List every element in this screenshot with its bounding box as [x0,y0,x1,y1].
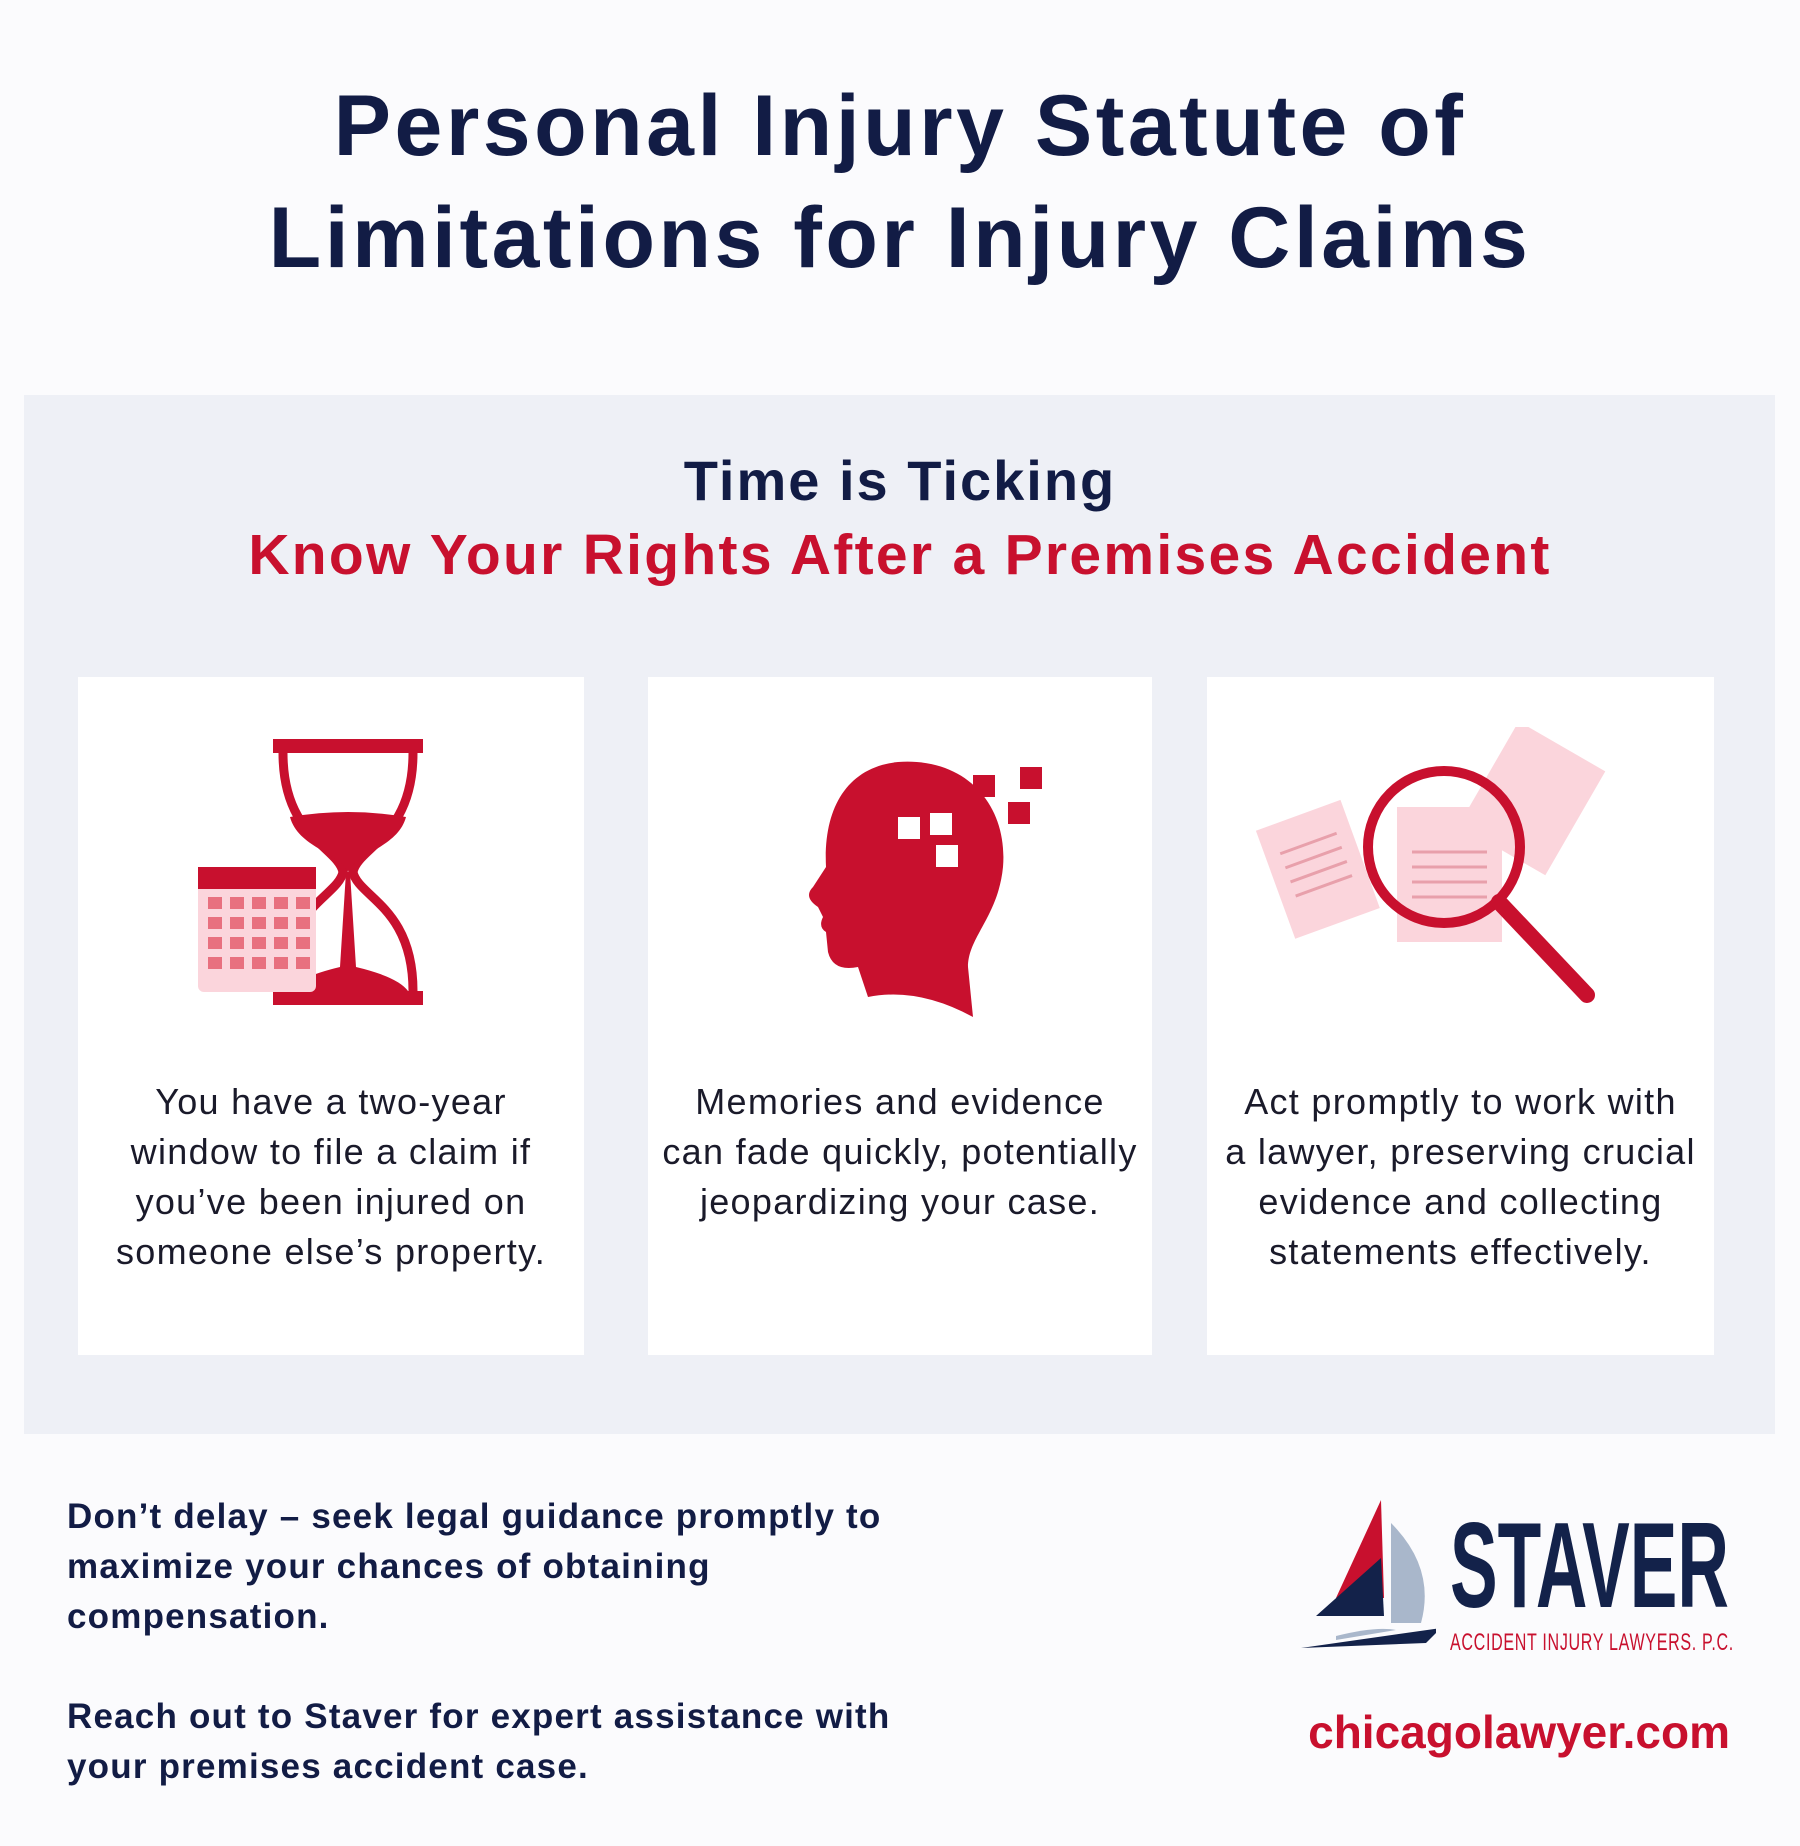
text: card 3: statements effectively. [1269,1231,1652,1272]
heading: time is ticking: Time is Ticking [684,449,1116,512]
text: card 3: Act promptly to work with [1244,1081,1677,1122]
text: card 3: evidence and collecting [1258,1181,1663,1222]
text: card 3: a lawyer, preserving crucial [1225,1131,1696,1172]
subheading: Know Your Rights After a Premises Accident [248,523,1552,587]
icon: head with fading squares [809,762,1042,1017]
card 1 [78,677,584,1355]
bottom text 1: compensation. [67,1597,330,1636]
icon: hourglass and calendar [198,739,423,1005]
text: card 2: Memories and evidence [695,1081,1105,1122]
title: Limitations for Injury Claims [269,190,1531,286]
bottom text 1: maximize your chances of obtaining [67,1547,711,1586]
bottom text 2: Reach out to Staver for expert assistance with [67,1697,890,1736]
bottom text 2 [67,1697,890,1786]
text: card 1: You have a two-year [155,1081,507,1122]
bottom text 1: Don’t delay – seek legal guidance promptly to [67,1497,881,1536]
logo text: STAVER [1450,1497,1729,1633]
text: card 3 [1225,1081,1696,1272]
text: card 1: someone else’s property. [116,1231,546,1272]
title [269,78,1531,286]
icon: sailboat [1301,1500,1436,1648]
text: card 1: window to file a claim if [131,1131,531,1172]
bottom text 1 [67,1497,881,1636]
text: card 1 [116,1081,546,1272]
logo subtitle: ACCIDENT INJURY LAWYERS. P.C. [1450,1629,1734,1656]
card 2 [648,677,1152,1355]
text: card 2 [662,1081,1138,1222]
panel: main [24,395,1775,1434]
text: card 2: jeopardizing your case. [700,1181,1100,1222]
icon: magnifying glass over documents [1256,727,1606,1003]
bottom text 2: your premises accident case. [67,1747,589,1786]
text: card 2: can fade quickly, potentially [662,1131,1138,1172]
website url: chicagolawyer.com [1308,1706,1730,1758]
logo [1301,1497,1734,1656]
text: card 1: you’ve been injured on [136,1181,526,1222]
card 3 [1207,677,1714,1355]
title: Personal Injury Statute of [334,78,1466,174]
